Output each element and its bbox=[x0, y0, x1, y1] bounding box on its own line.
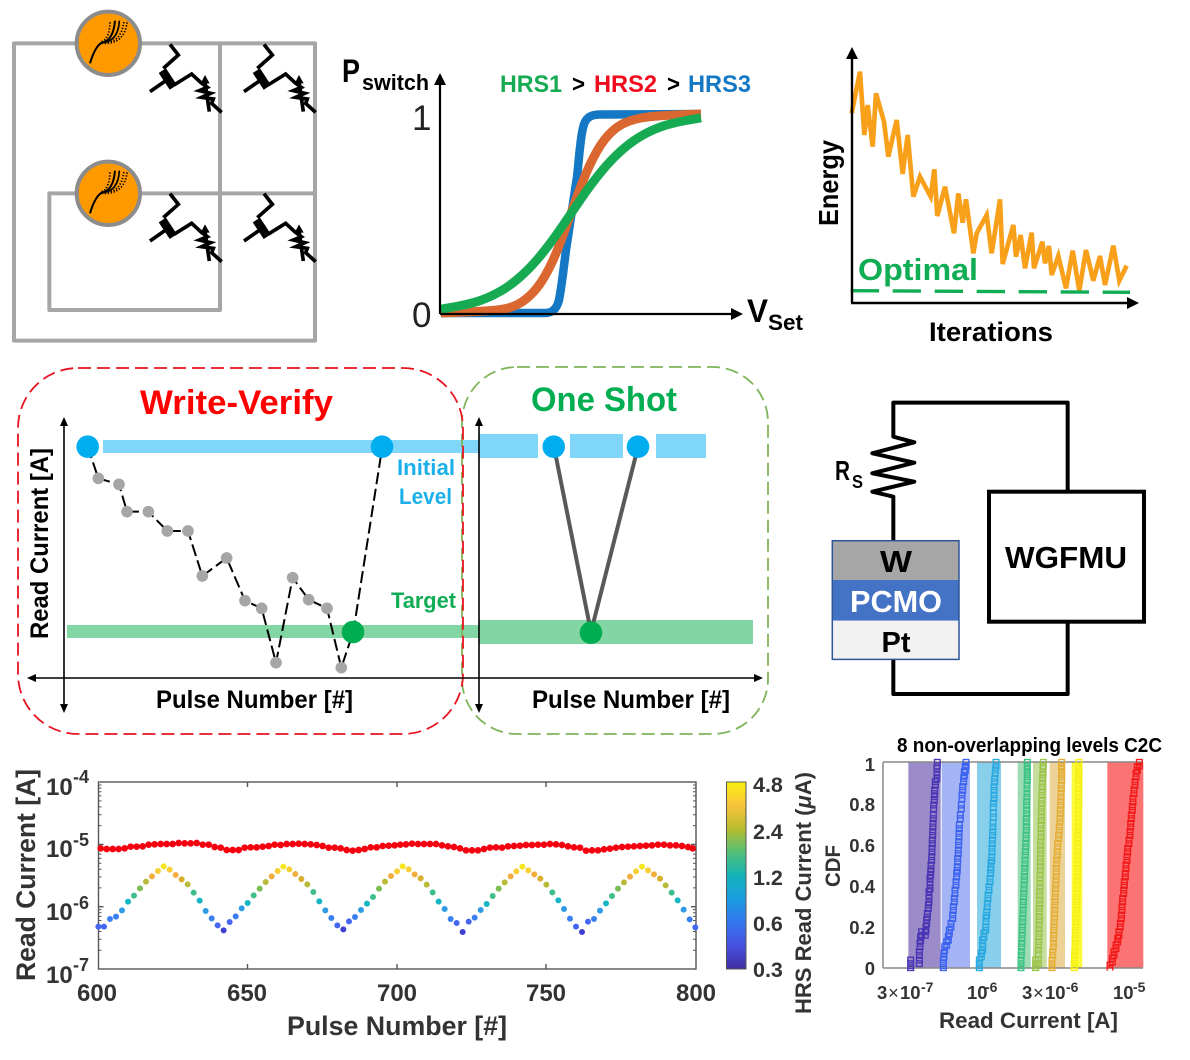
tick 0: 0 bbox=[412, 296, 431, 335]
x tick labels: 750 bbox=[526, 980, 566, 1007]
icon: 1T1R cell top left bbox=[150, 44, 222, 112]
legend: HRS ordering: HRS1 bbox=[500, 71, 562, 98]
y tick labels: 10 bbox=[46, 899, 73, 926]
y tick labels: 0.2 bbox=[849, 917, 875, 938]
crossbar wires bbox=[14, 43, 315, 341]
colorbar bbox=[726, 782, 746, 969]
x tick labels: 10 bbox=[1113, 982, 1134, 1003]
panel: switching probability chart bbox=[342, 53, 804, 335]
y axis arrow bbox=[434, 73, 446, 314]
legend: HRS ordering bbox=[500, 71, 751, 98]
write-verify pulse trace bbox=[88, 447, 382, 668]
x tick labels: × bbox=[888, 982, 899, 1003]
icon: top neuron circle bbox=[77, 12, 140, 75]
x tick labels: 3 bbox=[877, 982, 887, 1003]
x tick labels: × bbox=[1033, 982, 1044, 1003]
axis middle vertical bbox=[475, 417, 483, 713]
one shot lines bbox=[554, 447, 638, 632]
axis horizontal bbox=[27, 674, 763, 682]
initial level band bbox=[103, 434, 706, 458]
y tick labels: -5 bbox=[73, 830, 89, 850]
level bands bbox=[908, 762, 1143, 968]
panel: read current vs pulse number chart bbox=[11, 767, 816, 1041]
label: Initial Level: Level bbox=[399, 484, 452, 509]
colorbar tick labels: 0.3 bbox=[753, 958, 783, 982]
y axis label bbox=[342, 53, 429, 95]
label: WGFMU: WGFMU bbox=[1005, 540, 1127, 575]
x tick labels: 10 bbox=[1045, 982, 1066, 1003]
curve: HRS3 blue bbox=[441, 114, 701, 313]
legend: HRS ordering: HRS2 bbox=[594, 71, 657, 98]
y tick labels: 10 bbox=[46, 836, 73, 863]
label: Target: Target bbox=[391, 588, 457, 613]
x axis label: V bbox=[747, 293, 769, 329]
label: Read Current: Read Current [A] bbox=[26, 448, 54, 639]
label: Pulse Number: Pulse Number [#] bbox=[287, 1011, 507, 1041]
device stack: PCMO bbox=[850, 584, 942, 619]
y tick labels: 0.6 bbox=[849, 835, 875, 856]
label: Read Current: Read Current [A] bbox=[11, 769, 41, 981]
icon: bottom neuron circle bbox=[77, 162, 140, 225]
x tick labels: 3 bbox=[1022, 982, 1032, 1003]
colorbar tick labels: 0.6 bbox=[753, 912, 783, 936]
label: Optimal: Optimal bbox=[858, 252, 978, 287]
icon: 1T1R cell bottom right bbox=[244, 194, 316, 262]
colorbar tick labels: 4.8 bbox=[753, 773, 783, 797]
one shot outline bbox=[462, 367, 768, 734]
y tick labels: -4 bbox=[73, 767, 89, 787]
plot frame and ticks bbox=[98, 782, 696, 969]
x tick labels: -6 bbox=[985, 979, 998, 995]
axis left vertical bbox=[60, 417, 68, 713]
label: Energy: Energy bbox=[813, 140, 844, 226]
blue and green level dots bbox=[76, 435, 649, 644]
target level band bbox=[67, 620, 753, 644]
y axis label: P bbox=[342, 53, 360, 89]
energy trace and optimal line bbox=[851, 72, 1130, 292]
panel: energy vs iterations chart bbox=[813, 47, 1139, 347]
panel: crossbar array schematic bbox=[14, 12, 316, 341]
legend: HRS ordering: > bbox=[572, 71, 585, 98]
curve: HRS1 green bbox=[441, 118, 701, 309]
device stack: W bbox=[880, 544, 913, 579]
label: Initial Level: Initial bbox=[397, 455, 455, 480]
y tick labels bbox=[849, 754, 876, 979]
x axis label: Set bbox=[768, 310, 804, 335]
heading: Write-Verify: Write-Verify bbox=[140, 384, 333, 422]
x tick labels: 700 bbox=[377, 980, 417, 1007]
label: Iterations: Iterations bbox=[929, 317, 1053, 347]
y axis label: switch bbox=[362, 70, 429, 95]
axes bbox=[883, 762, 1143, 968]
title: 8 non-overlapping levels C2C bbox=[897, 735, 1162, 757]
label: Pulse Number right: Pulse Number [#] bbox=[532, 686, 730, 714]
data: HRS colored dots bbox=[98, 866, 695, 932]
colorbar label: HRS Read Current (μA) bbox=[791, 772, 816, 1014]
tick 1: 1 bbox=[412, 99, 431, 138]
label: Pulse Number left: Pulse Number [#] bbox=[156, 686, 353, 714]
heading: One Shot: One Shot bbox=[531, 381, 677, 419]
panel: CDF chart bbox=[822, 735, 1162, 1033]
x tick labels bbox=[77, 980, 716, 1007]
data: LRS red dots bbox=[101, 843, 693, 851]
circuit wires and resistor bbox=[872, 403, 1068, 694]
label: Rs: R bbox=[835, 455, 850, 486]
label: Rs bbox=[835, 455, 863, 492]
y tick labels bbox=[46, 767, 89, 989]
colorbar tick labels: 2.4 bbox=[753, 820, 783, 844]
y tick labels: 10 bbox=[46, 962, 73, 989]
y tick labels: -6 bbox=[73, 893, 89, 913]
CDF square marker curves bbox=[911, 762, 1139, 971]
x tick labels: 800 bbox=[676, 980, 716, 1007]
device stack: Pt bbox=[882, 627, 911, 659]
x tick labels: -6 bbox=[1066, 979, 1079, 995]
x tick labels: 10 bbox=[967, 982, 988, 1003]
write-verify outline bbox=[18, 368, 463, 734]
x axis arrow bbox=[440, 308, 743, 320]
x tick labels: -7 bbox=[921, 979, 934, 995]
panel: write-verify vs one shot bbox=[18, 367, 768, 734]
curve: HRS2 orange bbox=[441, 114, 701, 313]
label: CDF: CDF bbox=[822, 845, 845, 887]
x axis label bbox=[747, 293, 804, 335]
x tick labels: 600 bbox=[77, 980, 117, 1007]
colorbar tick labels: 1.2 bbox=[753, 866, 783, 890]
x tick labels: 10 bbox=[900, 982, 921, 1003]
icon: 1T1R cell top right bbox=[244, 44, 316, 112]
y tick labels: -7 bbox=[73, 955, 89, 975]
y tick labels: 1 bbox=[865, 754, 875, 775]
x tick labels: 650 bbox=[227, 980, 267, 1007]
label: Initial Level bbox=[397, 455, 455, 509]
y tick labels: 10 bbox=[46, 774, 73, 801]
y tick labels: 0.4 bbox=[849, 876, 876, 897]
x axis arrow bbox=[851, 297, 1139, 309]
legend: HRS ordering: HRS3 bbox=[688, 71, 751, 98]
device stack bbox=[832, 541, 959, 659]
icon: 1T1R cell bottom left bbox=[150, 194, 222, 262]
legend: HRS ordering: > bbox=[667, 71, 680, 98]
y tick labels: 0.8 bbox=[849, 794, 875, 815]
colorbar tick labels bbox=[753, 773, 783, 982]
label: Rs: S bbox=[852, 472, 863, 492]
y tick labels: 0 bbox=[865, 958, 875, 979]
y axis arrow bbox=[846, 47, 858, 303]
panel: measurement circuit bbox=[832, 403, 1144, 694]
x tick labels: -5 bbox=[1133, 979, 1146, 995]
WGFMU box bbox=[989, 492, 1144, 622]
x tick labels bbox=[877, 979, 1146, 1003]
label: Read Current: Read Current [A] bbox=[939, 1008, 1118, 1033]
